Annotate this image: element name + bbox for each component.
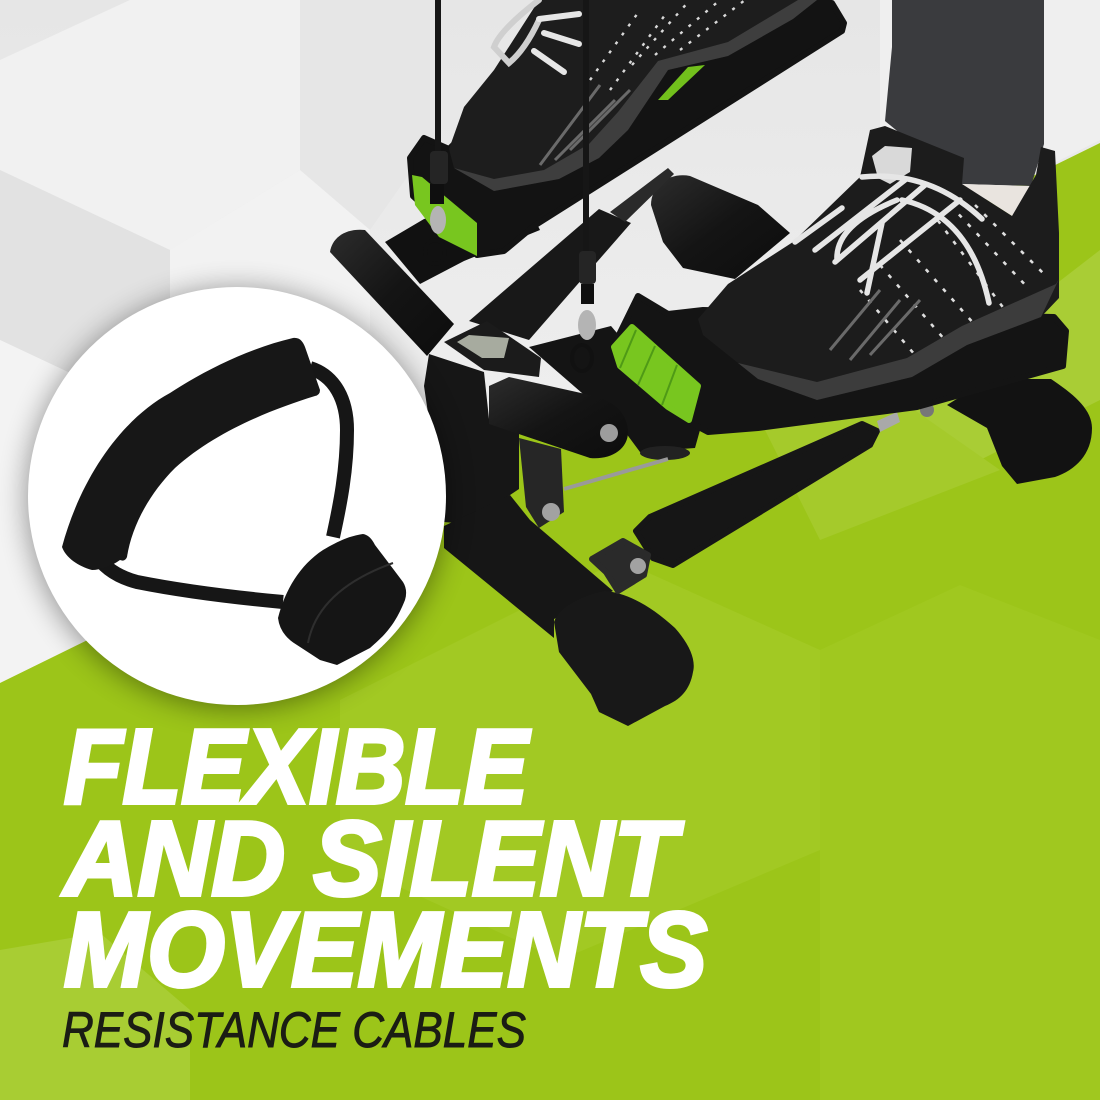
- stopper ball: [278, 534, 406, 665]
- sock: [962, 184, 1030, 218]
- left end tube: [330, 230, 454, 356]
- foam grip: [62, 338, 320, 570]
- title: MOVEMENTS: [64, 891, 707, 1009]
- resistance cable right: [572, 0, 596, 371]
- upper pedal: [410, 3, 844, 255]
- lower shoe laces: [795, 176, 989, 303]
- upper shoe: [449, 0, 817, 191]
- circle shadow: [27, 289, 447, 709]
- lower shoe: [698, 126, 1059, 400]
- front foot: [554, 591, 694, 726]
- lower pedal: [614, 296, 1066, 432]
- upper green insert: [658, 65, 705, 100]
- subtitle: RESISTANCE CABLES: [62, 1002, 526, 1058]
- cross tube behind upper pedal: [385, 190, 540, 284]
- diagonal tube: [469, 209, 631, 340]
- title: [61, 708, 707, 1009]
- main lower frame leg: [444, 495, 613, 638]
- steel cable and pulley: [564, 446, 690, 489]
- upper pedal green clip: [412, 175, 477, 256]
- arm behind lower pedal: [529, 326, 700, 452]
- heel logo: [872, 146, 912, 184]
- upper shoe laces: [494, 0, 579, 72]
- rear foot base: [947, 379, 1092, 484]
- display console: [444, 321, 541, 377]
- leg in dark trousers: [885, 0, 1044, 186]
- bracket and bolt: [519, 438, 564, 528]
- handle cord: [95, 368, 347, 602]
- title: FLEXIBLE: [64, 708, 531, 826]
- front roller: [489, 377, 628, 458]
- hydraulic piston: [636, 403, 934, 565]
- stepper machine: [330, 0, 1092, 726]
- lower pedal green clip: [614, 327, 698, 420]
- resistance cable left: [425, 0, 448, 264]
- piston clevis and bolt: [592, 541, 648, 591]
- rear roller: [651, 175, 790, 279]
- title: AND SILENT: [61, 800, 684, 918]
- upright post: [424, 354, 519, 524]
- callout circle: resistance cable handle: [27, 287, 447, 709]
